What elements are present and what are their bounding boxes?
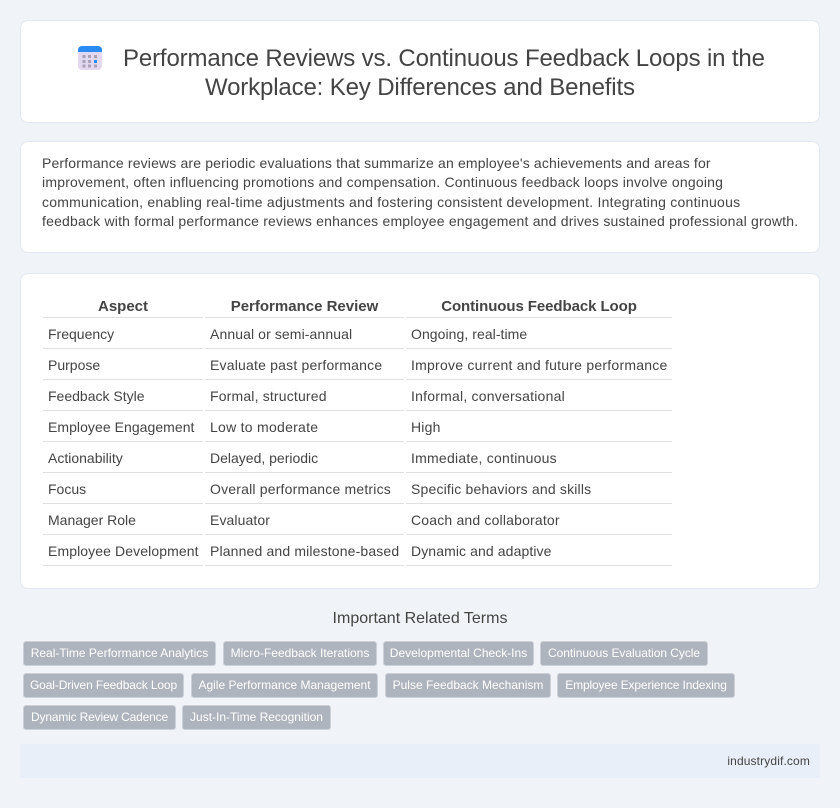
- title: Performance Reviews vs. Continuous Feedback Loops in the: [123, 45, 765, 72]
- related term tags: [23, 641, 735, 730]
- row: Frequency: Ongoing, real-time: [411, 326, 527, 342]
- row: Purpose: Improve current and future performance: [411, 357, 668, 373]
- tag: [23, 705, 176, 730]
- row: Actionability: [48, 450, 557, 466]
- intro panel: [20, 141, 820, 253]
- tag: Goal-Driven Feedback Loop: [30, 678, 177, 692]
- tag: [191, 673, 378, 698]
- tag: [182, 705, 331, 730]
- row: Employee Engagement: Employee Engagement: [48, 419, 194, 435]
- row: Employee Engagement: Low to moderate: [210, 419, 318, 435]
- row: Employee Engagement: [48, 419, 441, 435]
- row: Focus: Focus: [48, 481, 86, 497]
- title: [123, 45, 765, 101]
- row: Purpose: Purpose: [48, 357, 100, 373]
- tag: [540, 641, 708, 666]
- row: Frequency: [48, 326, 527, 342]
- row: Focus: [48, 481, 591, 497]
- row: Feedback Style: Informal, conversational: [411, 388, 565, 404]
- tag: Real-Time Performance Analytics: [31, 646, 208, 660]
- header panel: [20, 20, 820, 123]
- comparison table panel: [20, 273, 820, 589]
- intro paragraph: Performance reviews are periodic evaluations that summarize an employee's achievements and areas for: [42, 154, 711, 170]
- header: Aspect: Aspect: [98, 298, 148, 315]
- row: Feedback Style: Feedback Style: [48, 388, 144, 404]
- tag: [383, 641, 534, 666]
- tag: Just-In-Time Recognition: [190, 710, 323, 724]
- tag: Pulse Feedback Mechanism: [393, 678, 543, 692]
- footer bar: [20, 744, 820, 778]
- row: Actionability: Immediate, continuous: [411, 450, 557, 466]
- tag: [23, 673, 184, 698]
- related terms heading: Important Related Terms: [333, 610, 507, 627]
- row: Employee Development: [48, 543, 552, 559]
- row: Frequency: Annual or semi-annual: [210, 326, 352, 342]
- header: Performance Review: Performance Review: [231, 298, 378, 315]
- tag: [23, 641, 216, 666]
- row: Focus: Specific behaviors and skills: [411, 481, 591, 497]
- tag: [385, 673, 551, 698]
- tag: Developmental Check-Ins: [390, 646, 527, 660]
- tag: Micro-Feedback Iterations: [231, 646, 369, 660]
- row: Actionability: Delayed, periodic: [210, 450, 318, 466]
- row: Manager Role: Manager Role: [48, 512, 136, 528]
- icon: calendar: [78, 46, 102, 70]
- row: Employee Development: Planned and milestone-based: [210, 543, 399, 559]
- row: Actionability: Actionability: [48, 450, 123, 466]
- row: Feedback Style: [48, 388, 565, 404]
- intro paragraph: improvement, often influencing promotions and compensation. Continuous feedback loops involve ongoing: [42, 174, 723, 190]
- row: Feedback Style: Formal, structured: [210, 388, 327, 404]
- intro paragraph: feedback with formal performance reviews enhances employee engagement and drives sustained professional growth.: [42, 213, 798, 229]
- tag: Continuous Evaluation Cycle: [548, 646, 700, 660]
- header: Continuous Feedback Loop: Continuous Feedback Loop: [441, 298, 637, 315]
- tag: Employee Experience Indexing: [565, 678, 727, 692]
- row: Purpose: Evaluate past performance: [210, 357, 382, 373]
- intro paragraph: communication, enabling real-time adjustments and fostering consistent development. Integrating continuous: [42, 194, 740, 210]
- row: Purpose: [48, 357, 668, 373]
- row: Employee Engagement: High: [411, 419, 441, 435]
- row: Frequency: Frequency: [48, 326, 114, 342]
- row: Manager Role: Coach and collaborator: [411, 512, 560, 528]
- row: Employee Development: Dynamic and adaptive: [411, 543, 552, 559]
- tag: [223, 641, 377, 666]
- intro paragraph: [42, 154, 798, 229]
- title: Workplace: Key Differences and Benefits: [205, 74, 635, 101]
- row: Employee Development: Employee Development: [48, 543, 199, 559]
- tag: Dynamic Review Cadence: [31, 710, 168, 724]
- row: Manager Role: Evaluator: [210, 512, 270, 528]
- row: Focus: Overall performance metrics: [210, 481, 391, 497]
- footer source text: industrydif.com: [727, 754, 810, 768]
- tag: Agile Performance Management: [198, 678, 371, 692]
- tag: [557, 673, 735, 698]
- row: Manager Role: [48, 512, 560, 528]
